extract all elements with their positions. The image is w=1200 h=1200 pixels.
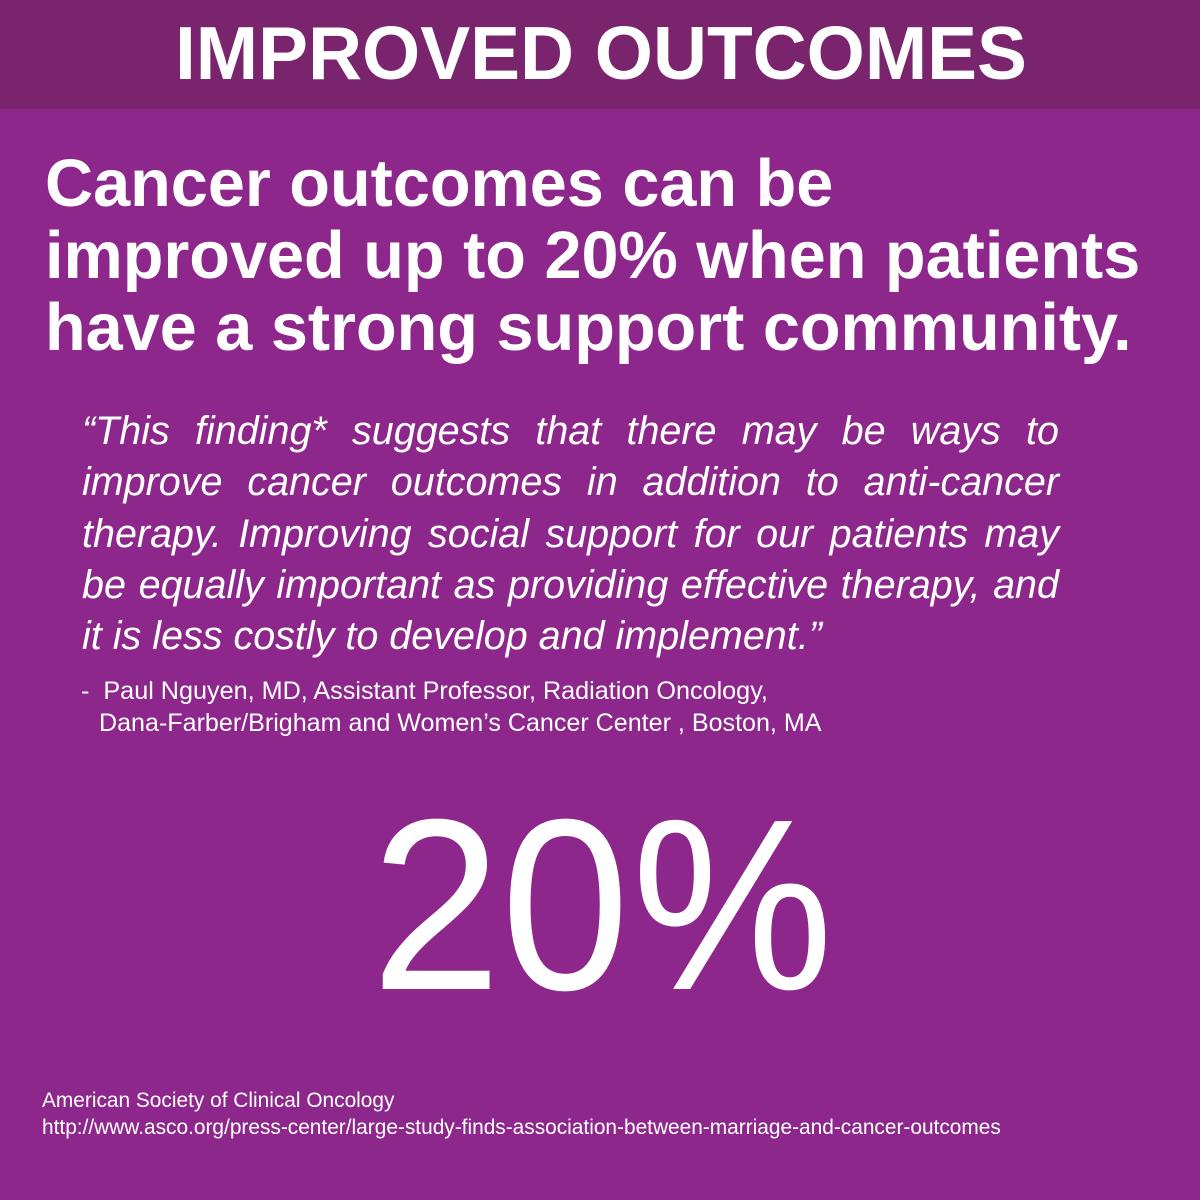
large statistic: 0 [501,768,629,1041]
quote attribution [81,677,822,737]
large statistic: 2 [371,768,501,1041]
quote text block [82,409,1061,658]
quote text block: it is less costly to develop and implement.” [82,614,822,658]
headline [45,147,1140,365]
headline: Cancer outcomes can be [45,147,833,221]
quote text block: “This finding* suggests that there may be ways to [82,409,1059,453]
source citation: American Society of Clinical Oncology [42,1089,394,1112]
large statistic [371,768,833,1041]
large statistic: % [632,768,833,1041]
header band [0,0,1200,109]
quote attribution: Dana-Farber/Brigham and Women’s Cancer Center , Boston, MA [99,709,821,737]
quote text block: therapy. Improving social support for our patients may [82,512,1059,556]
source citation [42,1089,1001,1139]
headline: have a strong support community. [45,291,1132,365]
quote text block: improve cancer outcomes in addition to anti-cancer [82,460,1059,504]
headline: improved up to 20% when patients [45,219,1140,293]
quote text block: be equally important as providing effective therapy, and [82,563,1059,607]
title: IMPROVED OUTCOMES [175,11,1027,95]
quote attribution: - Paul Nguyen, MD, Assistant Professor, Radiation Oncology, [81,677,768,705]
source citation: http://www.asco.org/press-center/large-study-finds-association-between-marriage-and-cancer-outcomes [42,1116,1001,1139]
